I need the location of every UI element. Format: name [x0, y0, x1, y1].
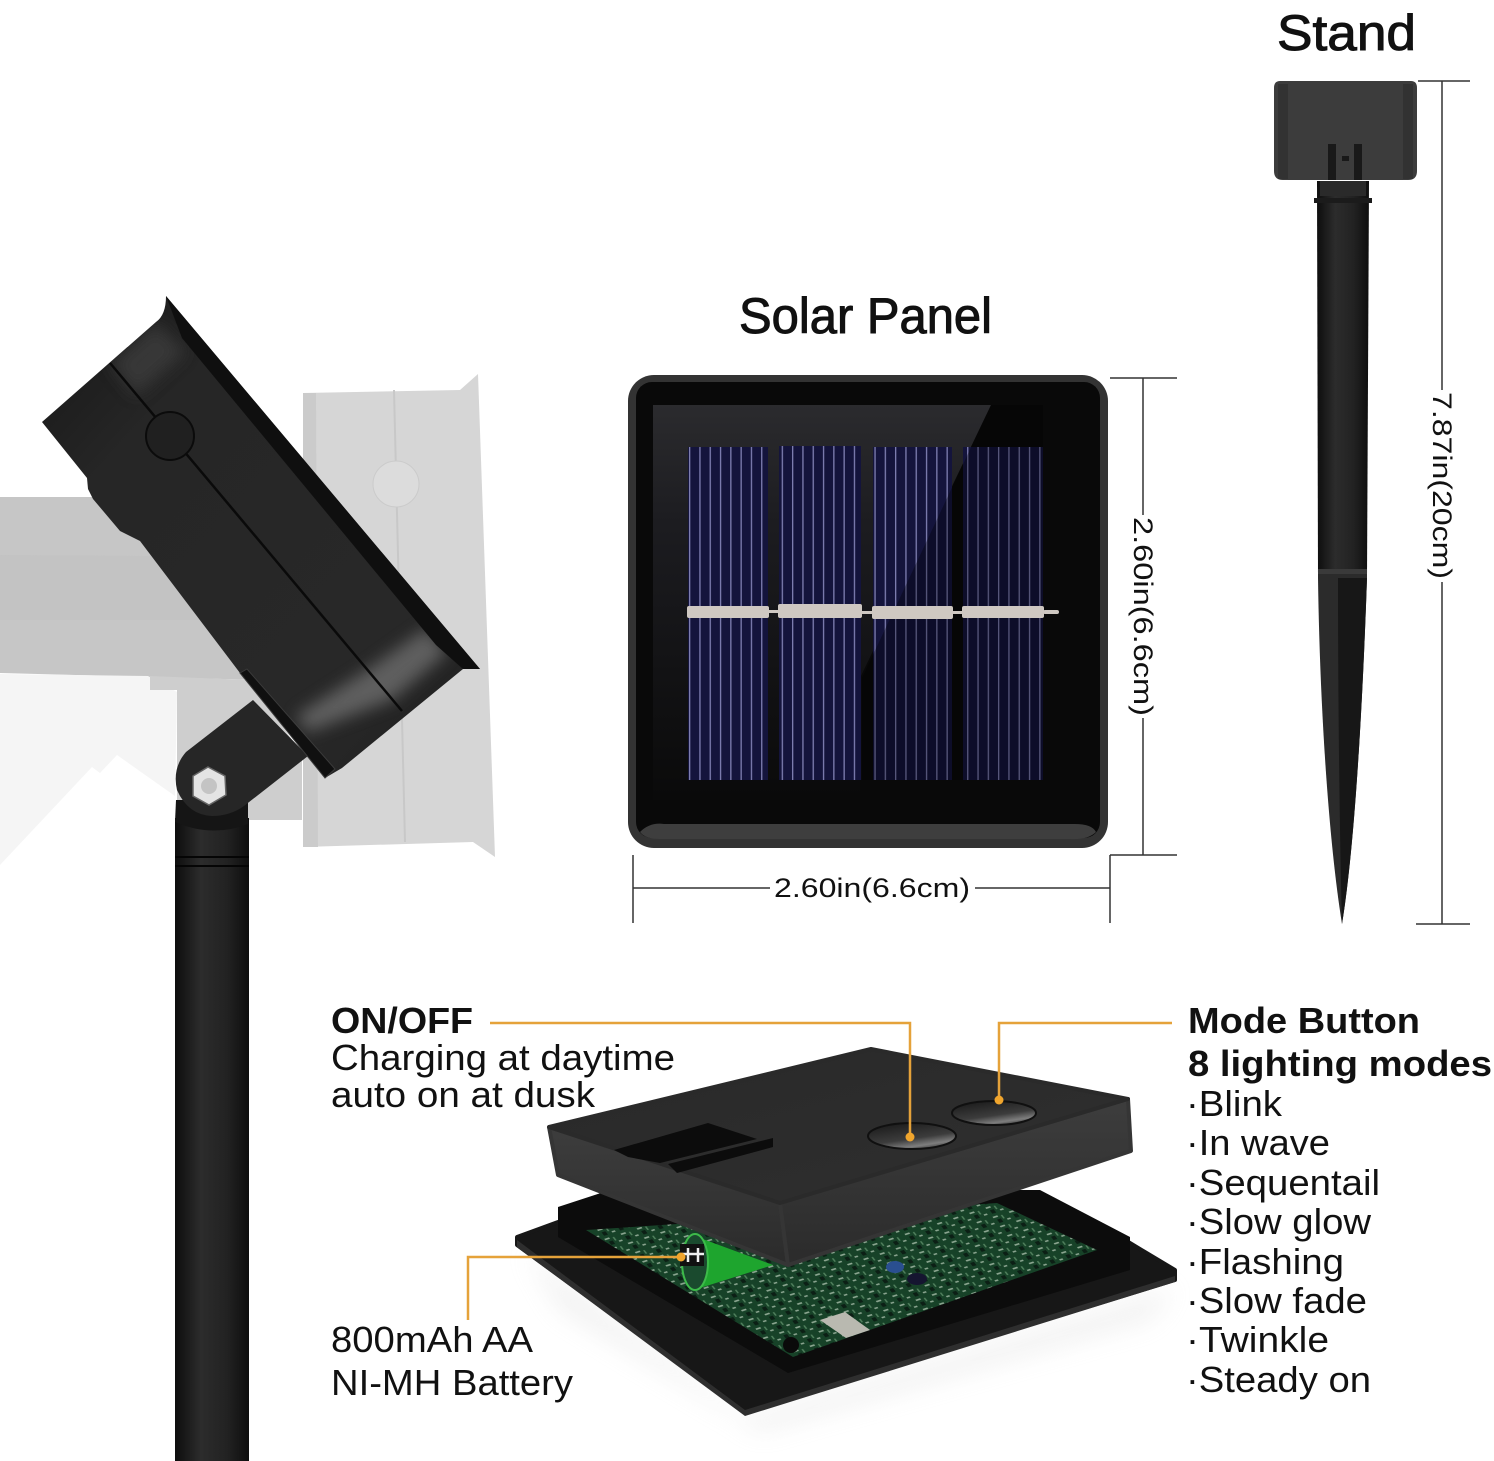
text: on/off description: ON/OFF	[331, 1000, 473, 1041]
dimension: panel width	[633, 855, 1110, 923]
solar panel	[628, 375, 1108, 848]
stand stake	[1274, 81, 1417, 924]
text: mode button and modes list	[1186, 1000, 1492, 1400]
dimension: panel width: 2.60in(6.6cm)	[774, 873, 970, 903]
text: on/off description: Charging at daytime	[331, 1037, 675, 1078]
text: mode button and modes list: ·Steady on	[1186, 1359, 1371, 1400]
callout line: battery	[468, 1252, 686, 1320]
ghost lamp: grey upright copy	[303, 374, 495, 857]
text: mode button and modes list: ·Twinkle	[1186, 1319, 1329, 1360]
title: Stand: Stand	[1277, 5, 1416, 61]
dimension: stand height: 7.87in(20cm)	[1427, 392, 1457, 579]
circuit board	[586, 1203, 1097, 1357]
callout line: mode button	[994, 1023, 1172, 1104]
soft shadow	[525, 1250, 1175, 1432]
inner housing	[558, 1190, 1130, 1373]
green battery	[680, 1234, 773, 1290]
text: battery: NI-MH Battery	[331, 1362, 573, 1403]
text: mode button and modes list: ·Sequentail	[1186, 1162, 1380, 1203]
pole of lamp	[175, 800, 249, 1461]
text: battery	[331, 1319, 573, 1403]
lamp bracket arm with bolt	[176, 700, 308, 816]
text: mode button and modes list: 8 lighting modes	[1188, 1043, 1492, 1084]
text: mode button and modes list: ·Blink	[1186, 1083, 1283, 1124]
control box exploded view	[517, 1049, 1175, 1432]
text: mode button and modes list: ·Slow fade	[1186, 1280, 1367, 1321]
dimension: panel height: 2.60in(6.6cm)	[1128, 517, 1158, 716]
dimension: stand height	[1416, 81, 1470, 924]
lid	[549, 1049, 1131, 1265]
dimension: panel height	[1110, 378, 1177, 855]
buttons	[868, 1101, 1036, 1149]
text: on/off description	[331, 1000, 675, 1115]
text: mode button and modes list: ·In wave	[1186, 1122, 1330, 1163]
text: battery: 800mAh AA	[331, 1319, 533, 1360]
background: grey ghost scene behind lamp	[0, 374, 495, 865]
text: on/off description: auto on at dusk	[331, 1074, 596, 1115]
solar cells	[688, 405, 1043, 780]
text: mode button and modes list: ·Flashing	[1186, 1241, 1344, 1282]
text: mode button and modes list: ·Slow glow	[1186, 1201, 1372, 1242]
lamp head	[42, 296, 480, 778]
base plate	[517, 1222, 1175, 1412]
busbar	[687, 604, 1059, 619]
title: Solar Panel: Solar Panel	[739, 288, 992, 344]
callout line: on/off	[490, 1023, 914, 1142]
text: mode button and modes list: Mode Button	[1188, 1000, 1420, 1041]
